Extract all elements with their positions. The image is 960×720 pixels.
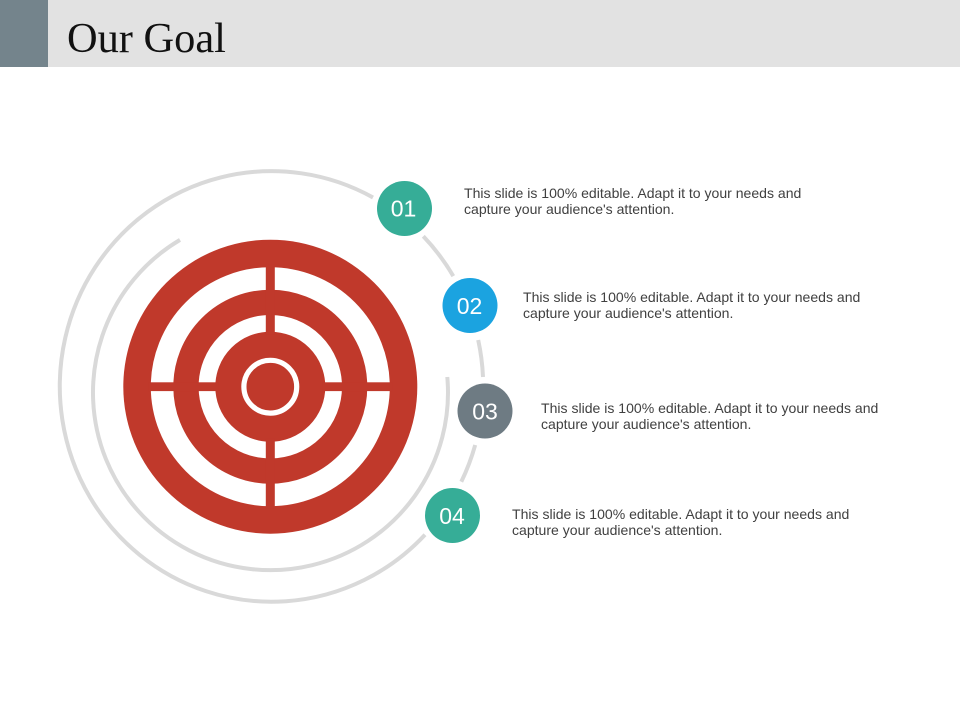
target icon xyxy=(123,240,417,534)
badge 03 xyxy=(458,384,512,438)
header band xyxy=(0,0,960,67)
text block 04: capture your audience's attention. xyxy=(512,522,722,538)
badge 01: 01 xyxy=(391,196,416,222)
text block 04: This slide is 100% editable. Adapt it to your needs and xyxy=(512,506,849,522)
header accent block xyxy=(0,0,48,67)
title: Our Goal xyxy=(67,15,226,62)
badge 02 xyxy=(442,278,498,333)
text block 04 xyxy=(512,506,849,538)
text block 01: This slide is 100% editable. Adapt it to your needs and xyxy=(464,185,801,201)
text block 03: This slide is 100% editable. Adapt it to your needs and xyxy=(541,400,878,416)
text block 03: capture your audience's attention. xyxy=(541,416,751,432)
badge 01 xyxy=(377,181,432,236)
text block 01 xyxy=(464,185,801,217)
badge 04: 04 xyxy=(439,503,465,529)
text block 03 xyxy=(541,400,878,432)
badge 02: 02 xyxy=(457,293,482,319)
text block 01: capture your audience's attention. xyxy=(464,201,674,217)
badge 04 xyxy=(425,488,480,543)
text block 02: This slide is 100% editable. Adapt it to your needs and xyxy=(523,289,860,305)
text block 02 xyxy=(523,289,860,321)
badge 03: 03 xyxy=(472,398,498,424)
outer orbit arcs xyxy=(60,171,483,602)
inner orbit arc xyxy=(93,240,448,570)
text block 02: capture your audience's attention. xyxy=(523,305,733,321)
